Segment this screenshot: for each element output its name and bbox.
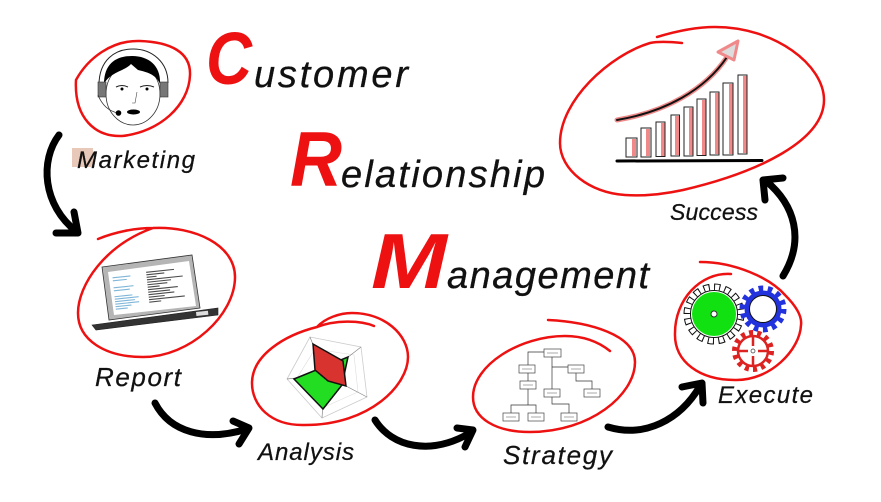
title: Management: anagement (447, 255, 650, 297)
icon: headset agent face (98, 49, 168, 125)
ring: analysis (252, 313, 408, 425)
title: Relationship: elationship (341, 154, 545, 196)
gear: green (688, 288, 740, 340)
arrow: report to analysis (155, 403, 249, 444)
ring: marketing (76, 41, 190, 136)
panel: report (78, 228, 235, 392)
title: Customer: ustomer (254, 54, 409, 96)
icon: gears (688, 288, 783, 369)
icon: laptop (92, 255, 218, 330)
ring: report (78, 228, 235, 357)
title: Management: M (371, 217, 449, 305)
panel: execute (675, 262, 813, 409)
panel: strategy (473, 320, 635, 470)
panel: marketing (72, 41, 196, 174)
label: execute: Execute (718, 382, 813, 409)
ring: strategy (473, 320, 635, 432)
title: Relationship (290, 115, 545, 203)
label: analysis: Analysis (256, 439, 354, 466)
title: Relationship: R (290, 115, 342, 203)
title: Customer (206, 17, 409, 100)
label: strategy: Strategy (503, 440, 614, 470)
ring: success (560, 27, 824, 195)
label: success: Success (670, 199, 758, 225)
arrow: marketing to report (47, 135, 78, 233)
panel: analysis (252, 313, 408, 466)
label: report: Report (95, 362, 183, 392)
gear: red (735, 333, 771, 369)
ring: execute (675, 262, 801, 380)
icon: org chart (503, 349, 600, 421)
arrow: strategy to execute (608, 383, 703, 430)
arrow: analysis to strategy (375, 420, 473, 447)
icon: radar chart (287, 337, 367, 418)
arrow: execute to success (763, 178, 795, 276)
label: marketing: Marketing (77, 147, 196, 174)
title: Customer: C (206, 17, 253, 100)
panel: success (560, 27, 824, 225)
title: Management (371, 217, 650, 305)
icon: rising bar chart (617, 41, 762, 161)
gear: blue (743, 289, 783, 329)
